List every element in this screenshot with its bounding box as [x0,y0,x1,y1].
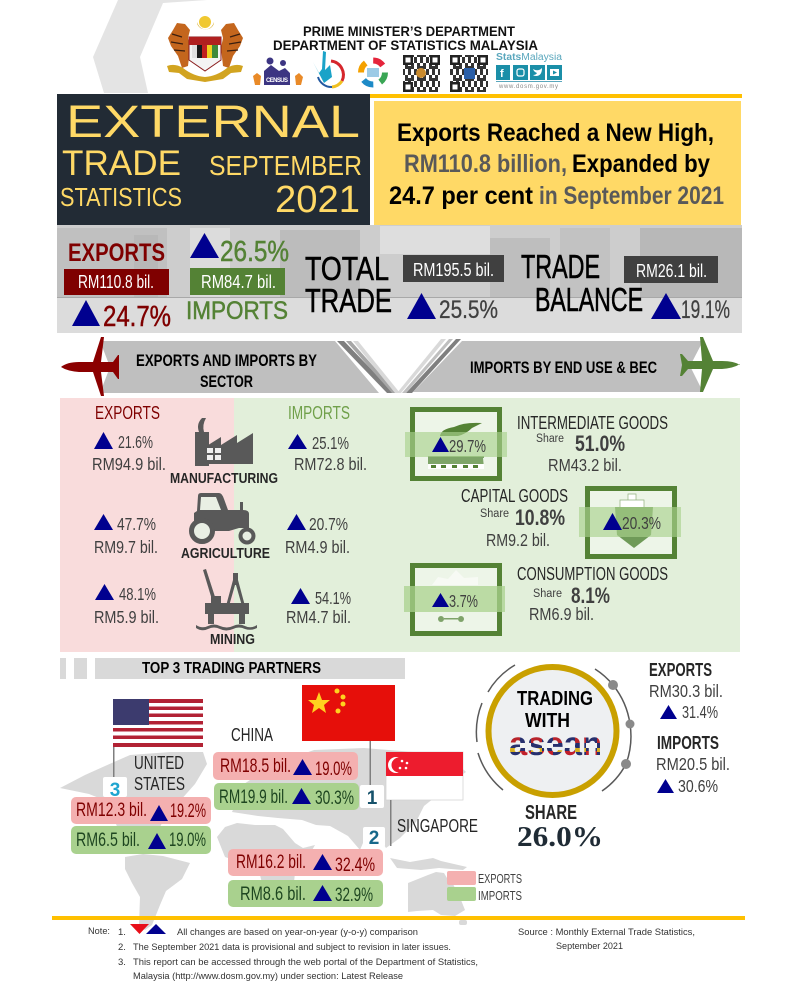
source [518,927,695,952]
panel: headline figures [57,225,742,333]
ASEAN share: SHARE [525,802,577,824]
imports figures: 26.5% [220,236,289,268]
consumption goods: CONSUMPTION GOODS [517,563,668,584]
panel: headline: RM110.8 billion, [404,150,567,178]
ASEAN share [517,802,603,853]
rank 2: 2 [369,828,379,849]
header: department names [273,24,538,53]
icon: oil rig [196,569,257,630]
capital goods [461,485,681,556]
rank 3 [103,777,127,801]
trade balance figures [521,248,730,324]
imports figures [186,233,289,325]
exports pill [213,752,358,780]
imports pill [214,783,359,810]
sector: mining: 48.1% [119,584,156,604]
imports figures: IMPORTS [186,297,288,325]
icon: census logo: CENSUS [266,78,288,84]
sector: agriculture [94,493,350,562]
badge: trading with ASEAN: WITH [525,710,570,732]
consumption goods: 8.1% [571,583,610,608]
notes [88,924,478,982]
exports figures: RM110.8 bil. [78,272,154,292]
social media block: f [500,68,504,80]
ASEAN imports: RM20.5 bil. [656,754,730,774]
capital goods: 10.8% [515,505,565,530]
partner: United States: UNITED [134,752,184,773]
notes: 2. [118,942,126,953]
exports figures: EXPORTS [68,239,165,267]
legend [447,871,522,903]
capital goods: RM9.2 bil. [486,530,550,550]
sector: mining: RM5.9 bil. [94,607,159,627]
flag: Singapore [386,752,463,846]
partner: United States: STATES [134,773,185,794]
icon: factory [195,418,253,466]
ASEAN exports: RM30.3 bil. [649,681,723,701]
ribbon: exports and imports by sector [100,341,400,393]
exports pill: RM12.3 bil. [76,800,147,821]
panel: title: EXTERNAL [66,96,360,147]
exports pill: 19.0% [315,759,352,780]
intermediate goods: RM43.2 bil. [548,455,622,475]
capital goods: Share [480,508,509,520]
trade balance figures: RM26.1 bil. [636,261,707,281]
exports pill: RM18.5 bil. [220,756,291,777]
imports pill: RM8.6 bil. [240,884,306,905]
exports pill: 32.4% [335,855,375,876]
sector: agriculture: 20.7% [309,514,348,534]
rank 3: 3 [110,780,120,801]
badge: trading with ASEAN: TRADING [517,688,593,710]
panel: headline [374,101,741,225]
panel: title: 2021 [275,179,360,221]
sector: mining [94,569,351,648]
sector: manufacturing: RM72.8 bil. [294,454,367,474]
notes: The September 2021 data is provisional and subject to revision in later issues. [133,942,451,953]
ribbon: imports by end use and BEC [397,339,703,393]
top rule [370,94,742,98]
sector: agriculture: 47.7% [117,514,156,534]
ASEAN exports: EXPORTS [649,660,712,680]
flag: United States [113,699,203,779]
capital goods: 20.3% [622,513,661,533]
icon: red plane [61,337,119,396]
panel: title: STATISTICS [60,182,182,212]
bottom rule [52,916,745,920]
panel: headline: Exports Reached a New High, [397,119,714,147]
consumption goods: Share [533,588,562,600]
total trade figures: TRADE [305,282,392,319]
total trade figures: RM195.5 bil. [413,260,494,280]
panel: sector background [60,398,740,652]
sector column headers: IMPORTS [288,403,350,423]
background chevron [93,0,207,93]
sector column headers: EXPORTS [95,403,160,423]
imports figures: RM84.7 bil. [201,272,276,292]
partner: Singapore: SINGAPORE [397,815,478,836]
partner: China [213,685,395,810]
panel: headline: Expanded by [572,150,710,178]
imports pill: 19.0% [169,830,206,851]
sector: mining: MINING [210,632,255,648]
ASEAN exports: 31.4% [682,702,718,722]
ASEAN imports: 30.6% [678,776,718,796]
ASEAN exports [649,660,723,722]
social media block: StatsMalaysia [496,52,562,63]
exports pill [228,849,383,876]
icon: census logo [253,58,303,85]
intermediate goods: INTERMEDIATE GOODS [517,412,668,433]
ASEAN imports: IMPORTS [657,733,719,753]
social media block: www.dosm.gov.my [498,84,558,90]
icon: QR code two [450,55,488,92]
exports figures: 24.7% [103,301,171,333]
exports figures [64,239,171,333]
imports pill: RM19.9 bil. [219,787,288,808]
panel: title: TRADE [62,144,181,183]
badge: trading with ASEAN: asean [509,725,602,762]
legend: IMPORTS [478,889,522,903]
notes: Malaysia (http://www.dosm.gov.my) under section: Latest Release [133,971,403,982]
intermediate goods: 29.7% [449,436,486,456]
notes: Note: [88,926,110,937]
intermediate goods [405,410,668,478]
notes: 1. [118,927,126,938]
section title: top 3 trading partners: TOP 3 TRADING PARTNERS [142,660,321,677]
flag: China [302,685,395,786]
sector: manufacturing: RM94.9 bil. [92,454,166,474]
header: department names: PRIME MINISTER’S DEPARTMENT [303,24,516,39]
sector: manufacturing: 21.6% [118,432,153,452]
icon: tractor [192,493,254,542]
intermediate goods: 51.0% [575,431,625,456]
sector: manufacturing [92,418,367,487]
partner: United States [71,699,211,854]
intermediate goods: Share [536,433,564,445]
sector: mining: RM4.7 bil. [286,607,351,627]
ribbon: exports and imports by sector: SECTOR [200,372,253,391]
exports pill [71,797,211,824]
sector: agriculture: AGRICULTURE [181,546,270,562]
imports pill [228,880,383,907]
sector: manufacturing: 25.1% [312,433,349,453]
header: department names: DEPARTMENT OF STATISTICS MALAYSIA [273,38,538,53]
ASEAN imports [656,733,730,796]
sector: mining: 54.1% [315,588,351,608]
total trade figures: 25.5% [439,296,498,324]
rank 1: 1 [367,788,378,809]
legend: EXPORTS [478,872,522,886]
world map [60,748,467,930]
icon: statistics day logo [313,51,343,87]
icon: SDG wheel [361,60,385,84]
ribbon: imports by end use and BEC: IMPORTS BY END USE & BEC [470,358,657,377]
partner: China: CHINA [231,724,273,745]
notes: This report can be accessed through the web portal of the Department of Statistics, [133,957,478,968]
sector: agriculture: RM4.9 bil. [285,537,350,557]
icon: green plane [680,337,740,392]
trade balance figures: BALANCE [535,281,643,318]
imports pill: 30.3% [315,788,354,809]
trade balance figures: TRADE [521,248,600,285]
icon: QR code one [403,55,440,92]
notes: All changes are based on year-on-year (y-o-y) comparison [177,927,418,938]
ribbon: exports and imports by sector: EXPORTS AND IMPORTS BY [136,351,318,370]
sector column headers [95,403,350,423]
rank 2 [363,827,385,849]
imports pill: 32.9% [335,885,373,906]
section title: top 3 trading partners [60,658,405,679]
notes: 3. [118,957,126,968]
exports pill: RM16.2 bil. [236,852,306,873]
trade balance figures: 19.1% [681,296,730,324]
sector: agriculture: RM9.7 bil. [94,537,158,557]
sector: manufacturing: MANUFACTURING [170,471,278,487]
consumption goods: RM6.9 bil. [529,604,594,624]
panel: headline: 24.7 per cent [389,182,534,210]
social media block [496,52,562,90]
rank 1 [360,785,384,809]
exports pill: 19.2% [170,801,206,822]
source: Source : Monthly External Trade Statistics, [518,927,695,938]
icon: red and blue triangles [130,924,166,934]
capital goods: CAPITAL GOODS [461,485,568,506]
source: September 2021 [556,941,623,952]
imports pill: RM6.5 bil. [76,830,140,851]
panel: headline: in September 2021 [539,182,724,210]
total trade figures [305,250,504,324]
consumption goods: 3.7% [449,591,478,611]
panel: title [57,94,370,225]
partner: Singapore [228,752,478,907]
badge: trading with ASEAN [476,665,634,795]
imports pill [71,826,211,854]
icon: Malaysia coat of arms [167,16,243,82]
panel: title: SEPTEMBER [209,150,362,181]
total trade figures: TOTAL [305,250,389,287]
ASEAN share: 26.0% [517,821,603,853]
consumption goods [404,563,668,634]
